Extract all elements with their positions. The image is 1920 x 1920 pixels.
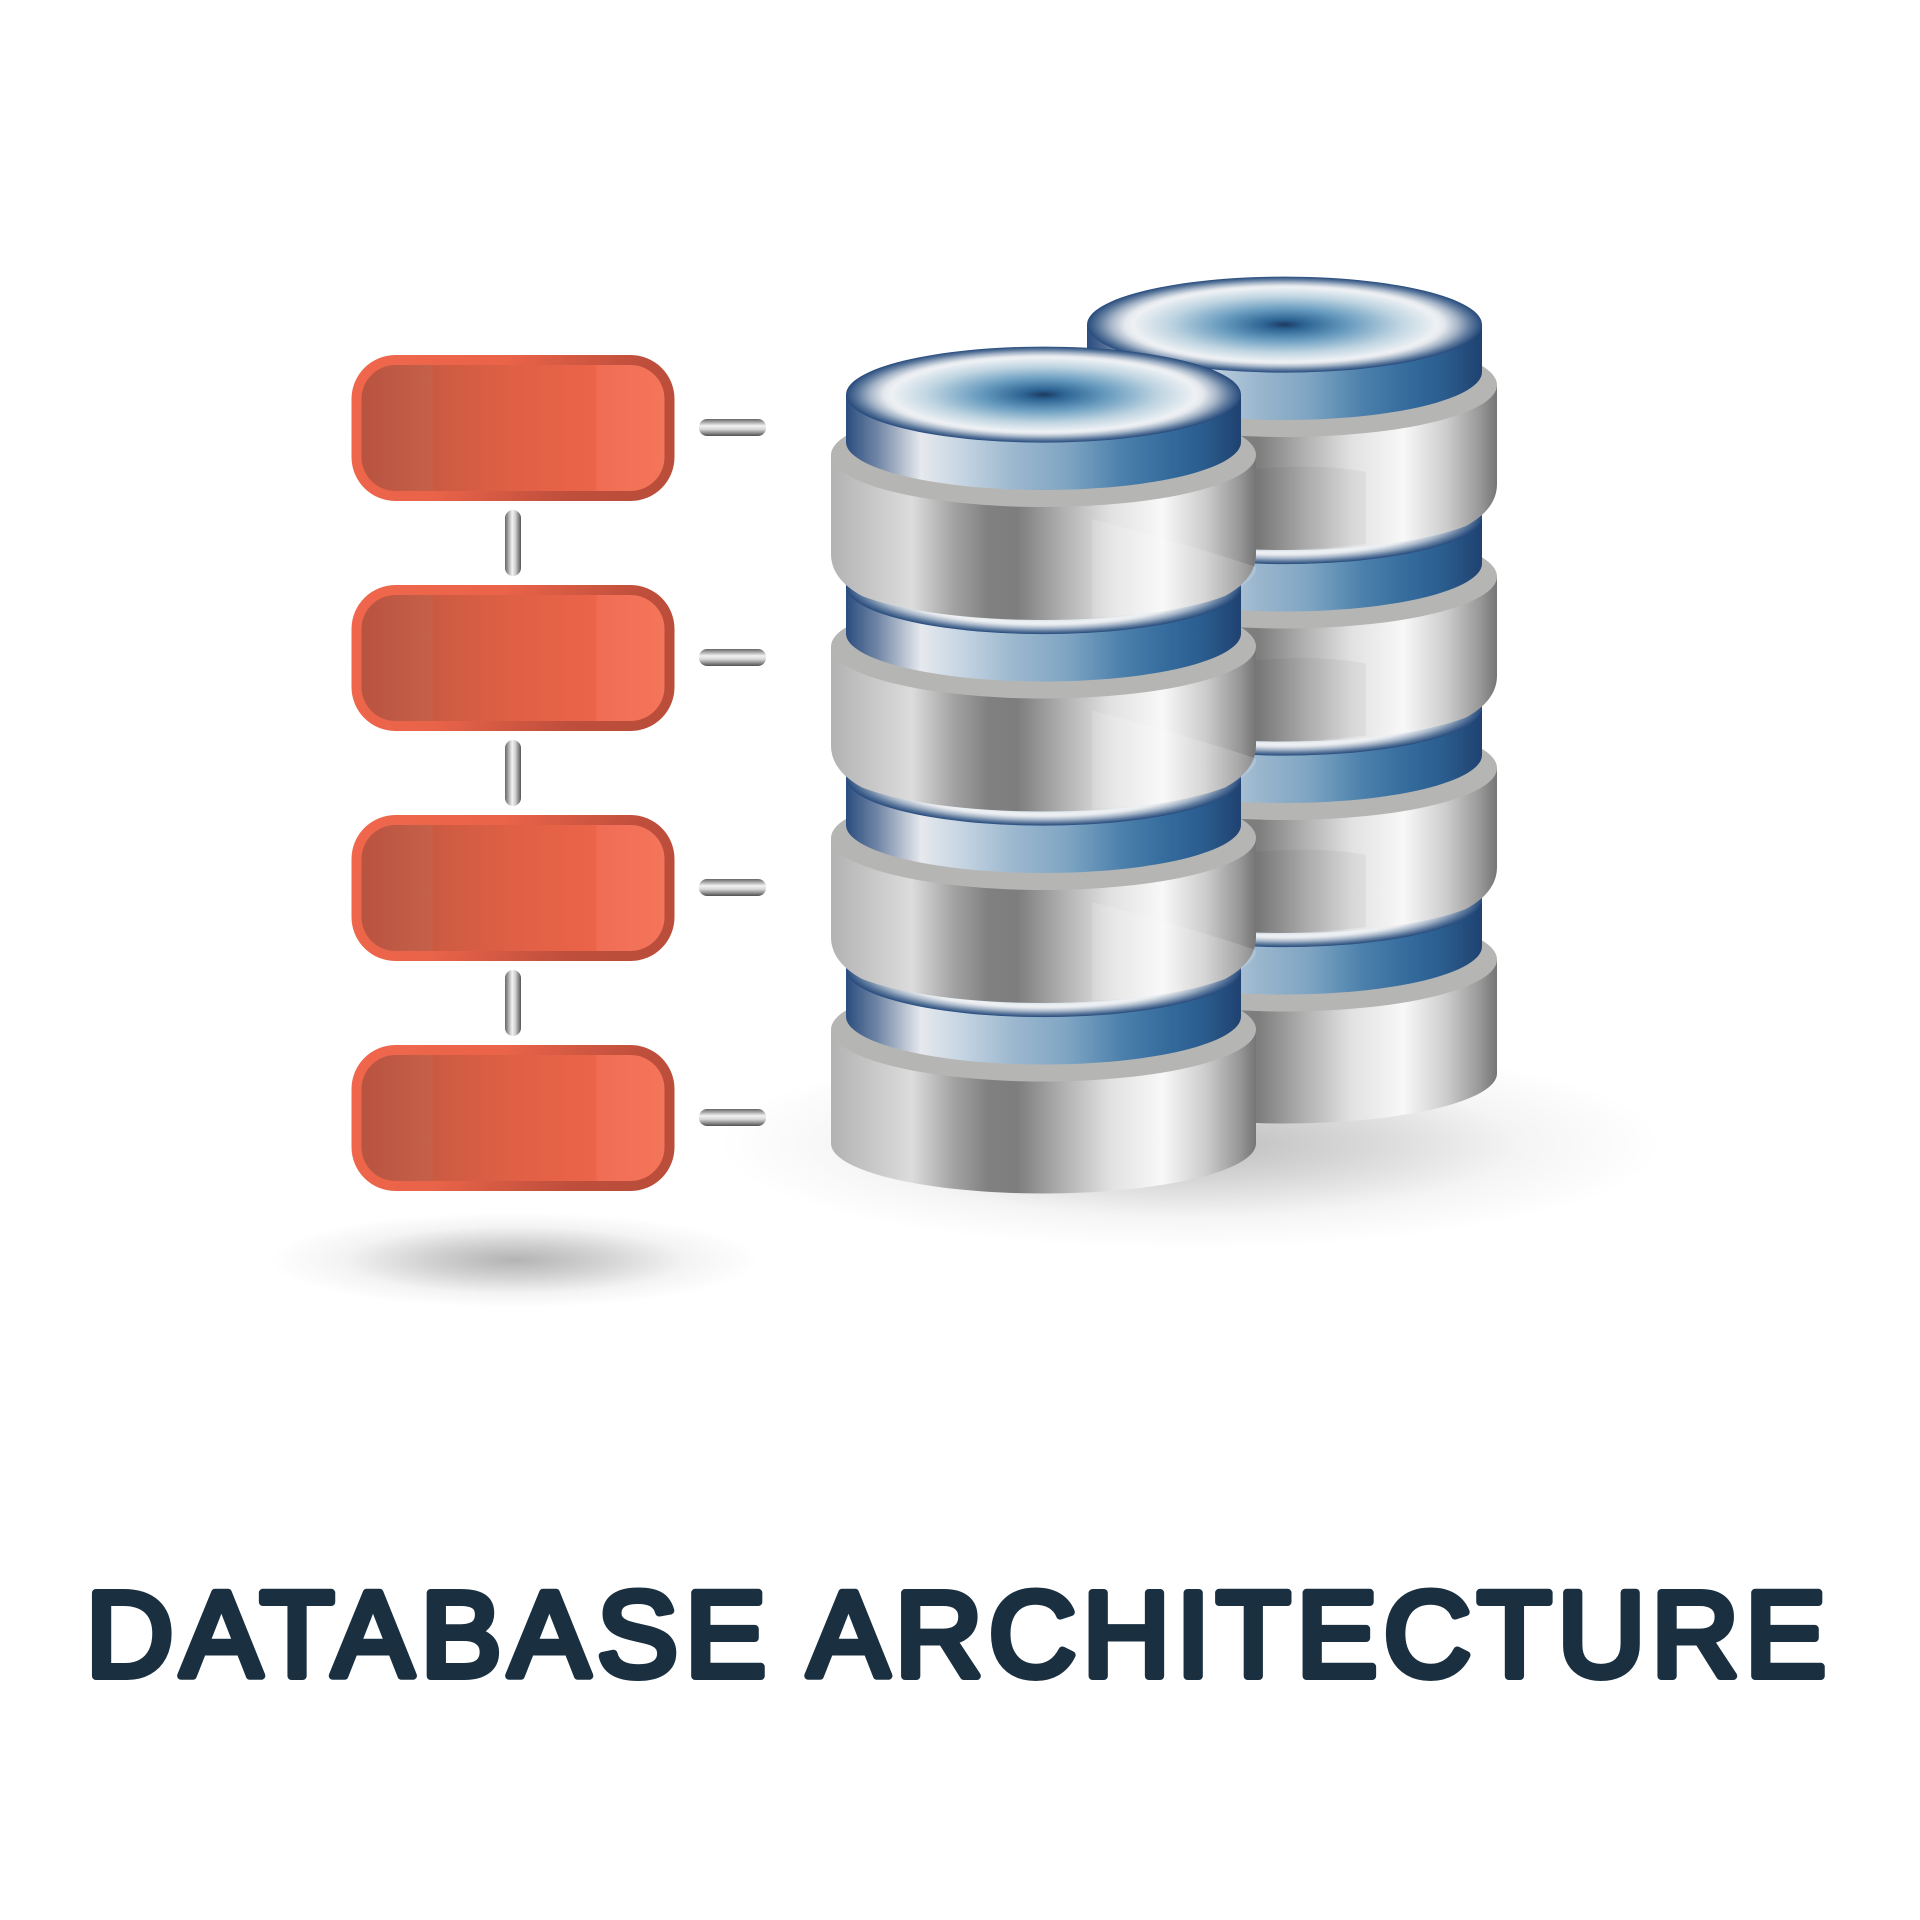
shadow under red blocks — [269, 1212, 759, 1308]
dim reflections on back stack — [1255, 467, 1366, 934]
front database cylinder stack — [831, 347, 1256, 1193]
title: DATABASE — [86, 1566, 766, 1702]
back database cylinder stack — [1072, 277, 1497, 1123]
title: ARCHITECTURE — [808, 1566, 1826, 1702]
block 1 — [352, 355, 674, 501]
title — [86, 1566, 1826, 1702]
block 2 — [352, 585, 674, 731]
horizontal connectors to database — [699, 419, 766, 1126]
vertical connectors between blocks — [505, 510, 521, 1036]
red schema blocks column — [352, 355, 674, 1191]
block 4 — [352, 1045, 674, 1191]
shadow under database stacks — [718, 1039, 1662, 1249]
block 3 — [352, 815, 674, 961]
